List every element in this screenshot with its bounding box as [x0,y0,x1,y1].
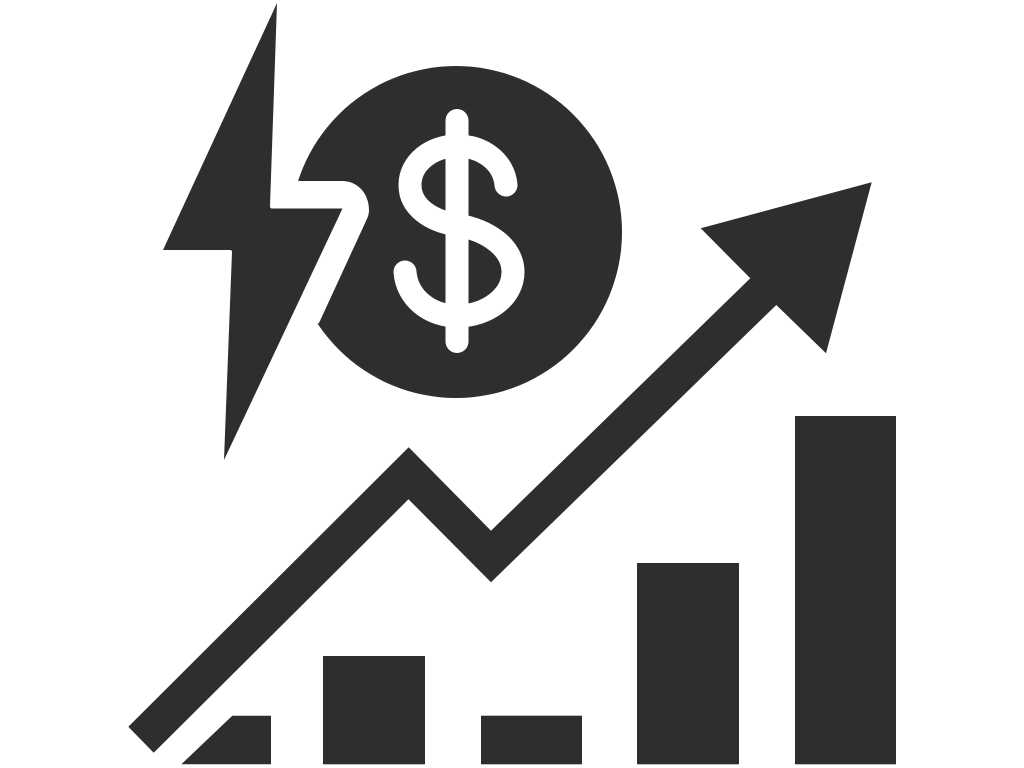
bar 5 [795,416,896,764]
arrow: rising trend line [128,182,872,753]
bar chart [181,416,896,764]
icon: lightning bolt [163,3,342,460]
bar 4 [637,563,739,764]
icon: dollar coin [270,66,622,398]
bar 3 [481,716,582,764]
bar 2 [323,656,425,764]
icon: dollar sign [405,120,513,342]
bar 1 [181,716,271,764]
